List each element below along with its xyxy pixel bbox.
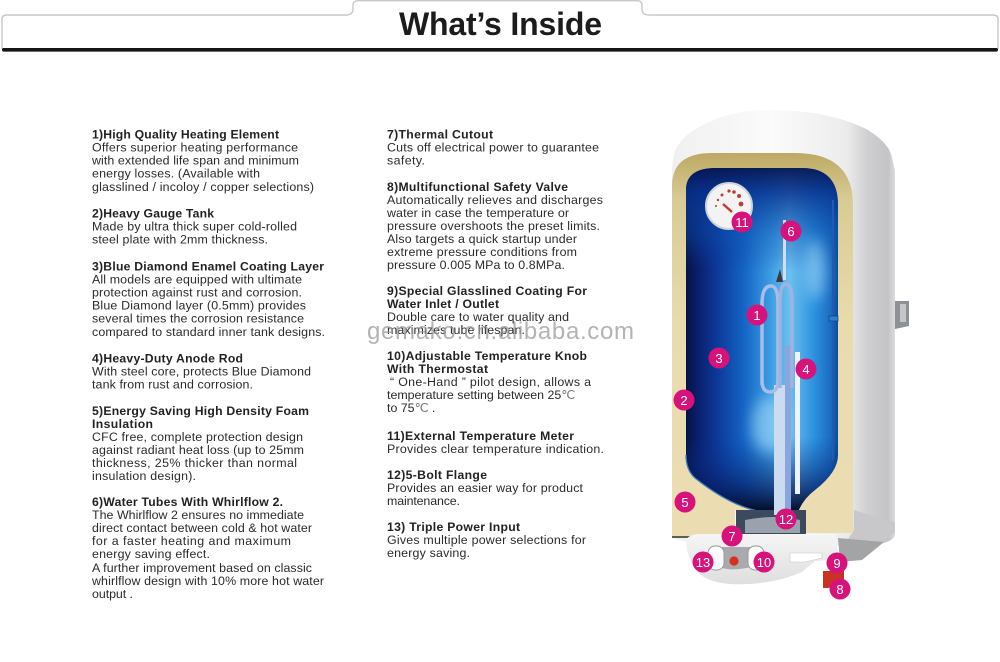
text column: features 1 to 6: 4)Heavy-Duty Anode Rod xyxy=(92,352,243,366)
text column: features 1 to 6: Offers superior heating performance xyxy=(92,140,298,154)
title banner xyxy=(2,1,998,52)
text column: features 7 to 13: 9)Special Glasslined Coating For xyxy=(387,284,587,298)
text column: features 1 to 6: protection against rust and corrosion. xyxy=(92,286,302,300)
knobs xyxy=(708,546,724,570)
text column: features 1 to 6: CFC free, complete protection design xyxy=(92,430,303,444)
text column: features 1 to 6: With steel core, protects Blue Diamond xyxy=(92,364,311,378)
text column: features 7 to 13: 8)Multifunctional Safety Valve xyxy=(387,180,568,194)
number badges: 6 xyxy=(787,224,795,239)
anode rod and water tube xyxy=(783,220,786,280)
text column: features 7 to 13: 12)5-Bolt Flange xyxy=(387,468,487,482)
heater body xyxy=(672,110,895,546)
number badges xyxy=(674,212,850,600)
title: What’s Inside xyxy=(399,6,602,42)
number badges: 3 xyxy=(715,351,723,366)
text column: features 1 to 6: energy losses. (Available with xyxy=(92,166,260,180)
number badges: 12 xyxy=(779,512,793,527)
text column: features 7 to 13: safety. xyxy=(387,154,425,168)
text column: features 1 to 6: tank from rust and corrosion. xyxy=(92,378,253,392)
watermark: gemako.cn.alibaba.com xyxy=(367,318,634,345)
control panel housing xyxy=(686,534,838,584)
number badges: 2 xyxy=(680,393,688,408)
text column: features 1 to 6: insulation design). xyxy=(92,469,196,483)
number badges: 8 xyxy=(836,582,844,597)
text column: features 1 to 6: whirlflow design with 10% more hot water xyxy=(91,574,324,588)
text column: features 7 to 13: 10)Adjustable Temperature Knob xyxy=(387,349,587,363)
text column: features 7 to 13: 13) Triple Power Input xyxy=(387,520,520,534)
text column: features 7 to 13: Automatically relieves and discharges xyxy=(387,193,603,207)
text column: features 1 to 6: The Whirlflow 2 ensures no immediate xyxy=(92,508,304,522)
wall bracket xyxy=(894,301,909,329)
text column: features 1 to 6: 3)Blue Diamond Enamel Coating Layer xyxy=(92,260,324,274)
text column: features 7 to 13: maintenance. xyxy=(387,494,460,508)
indicator light xyxy=(729,556,739,566)
number badges: 5 xyxy=(681,495,689,510)
number badges: 4 xyxy=(802,362,810,377)
text column: features 1 to 6: compared to standard inner tank designs. xyxy=(92,325,325,339)
text column: features 1 to 6: A further improvement based on classic xyxy=(92,561,312,575)
text column: features 7 to 13: Cuts off electrical power to guarantee xyxy=(387,140,599,154)
text column: features 7 to 13: “ One-Hand ” pilot design, allows a xyxy=(390,375,591,389)
tank shading xyxy=(686,168,838,512)
text column: features 7 to 13: Gives multiple power selections for xyxy=(387,533,586,547)
text column: features 7 to 13: to 75℃ . xyxy=(387,401,435,415)
inner blue tank xyxy=(686,168,838,512)
neck and flange area xyxy=(736,510,806,534)
text column: features 7 to 13: 11)External Temperature Meter xyxy=(387,429,574,443)
text column: features 1 to 6: Blue Diamond layer (0.5mm) provides xyxy=(92,298,306,312)
text column: features 1 to 6: energy saving effect. xyxy=(92,547,210,561)
foam base shadow xyxy=(672,536,735,538)
text column: features 1 to 6: output . xyxy=(92,587,133,601)
text column: features 7 to 13: Water Inlet / Outlet xyxy=(387,297,499,311)
text column: features 1 to 6: 6)Water Tubes With Whirlflow 2. xyxy=(92,495,283,509)
text column: features 1 to 6: 5)Energy Saving High Density Foam xyxy=(92,404,309,418)
text column: features 1 to 6: thickness, 25% thicker than normal xyxy=(92,456,297,470)
number badges: 1 xyxy=(753,308,761,323)
text column: features 7 to 13 xyxy=(386,128,604,560)
text column: features 1 to 6: with extended life span and minimum xyxy=(91,154,299,168)
text column: features 1 to 6: Made by ultra thick super cold-rolled xyxy=(92,220,297,234)
number badges: 9 xyxy=(833,556,841,571)
number badges: 7 xyxy=(728,529,736,544)
text column: features 1 to 6: All models are equipped with ultimate xyxy=(92,272,302,286)
text column: features 1 to 6: against radiant heat loss (up to 25mm xyxy=(92,443,304,457)
text column: features 1 to 6: Insulation xyxy=(92,417,153,431)
temperature gauge xyxy=(706,183,752,229)
text column: features 7 to 13: Also targets a quick startup under xyxy=(387,232,577,246)
text column: features 7 to 13: With Thermostat xyxy=(387,362,488,376)
foam insulation layer xyxy=(672,153,853,537)
text column: features 1 to 6: 2)Heavy Gauge Tank xyxy=(92,206,214,220)
heating element loops xyxy=(762,286,778,392)
text column: features 7 to 13: Double care to water quality and xyxy=(387,310,569,324)
number badges: 11 xyxy=(735,215,749,230)
text column: features 7 to 13: extreme pressure conditions from xyxy=(387,245,577,259)
text column: features 7 to 13: temperature setting between 25℃ xyxy=(387,388,575,402)
text column: features 1 to 6: for a faster heating and maximum xyxy=(92,534,291,548)
number badges: 10 xyxy=(757,555,771,570)
water heater cutaway illustration xyxy=(672,110,909,588)
text column: features 7 to 13: Provides an easier way for product xyxy=(387,481,584,495)
text column: features 1 to 6: several times the corrosion resistance xyxy=(92,312,304,326)
text column: features 7 to 13: Provides clear temperature indication. xyxy=(387,442,604,456)
text column: features 1 to 6: direct contact between cold & hot water xyxy=(92,521,312,535)
number badges: 13 xyxy=(696,555,710,570)
text column: features 7 to 13: energy saving. xyxy=(387,546,470,560)
text column: features 7 to 13: pressure 0.005 MPa to 0.8MPa. xyxy=(387,258,565,272)
text column: features 7 to 13: pressure overshoots the preset limits. xyxy=(387,219,600,233)
text column: features 7 to 13: 7)Thermal Cutout xyxy=(387,128,493,142)
text column: features 1 to 6: glasslined / incoloy / copper selections) xyxy=(92,180,314,194)
water highlights xyxy=(752,240,825,453)
text column: features 1 to 6: steel plate with 2mm thickness. xyxy=(92,232,268,246)
text column: features 7 to 13: water in case the temperature or xyxy=(386,206,569,220)
text column: features 1 to 6 xyxy=(91,128,325,601)
red valve xyxy=(823,571,844,588)
text column: features 7 to 13: maximizes tube lifespan. xyxy=(387,323,525,337)
text column: features 1 to 6: 1)High Quality Heating Element xyxy=(92,128,279,142)
